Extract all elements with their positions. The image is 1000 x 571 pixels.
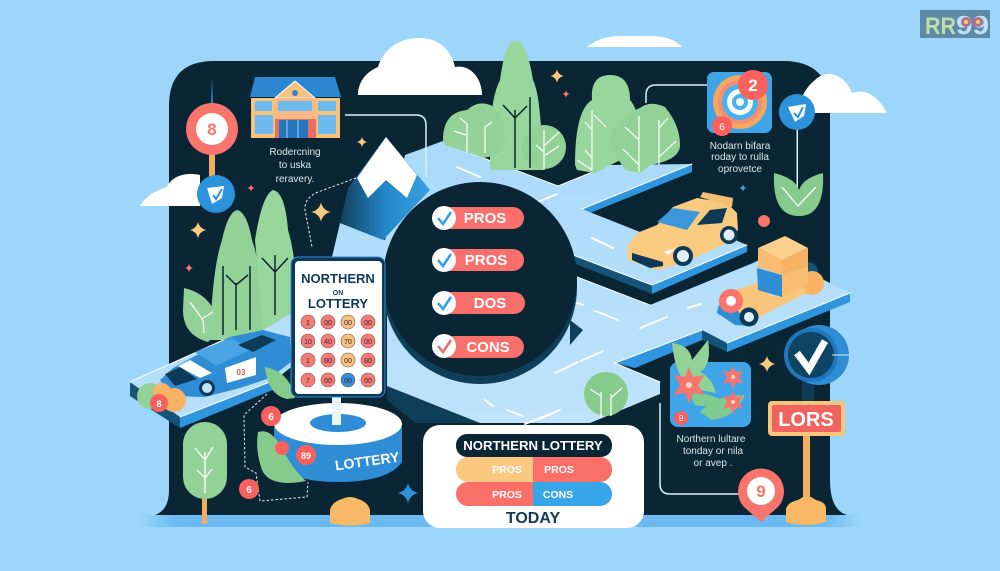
- road edge lines and lane dashes: [130, 153, 850, 424]
- pill: pros 2: [432, 248, 524, 272]
- marker: ball 8 with stem: 8: [207, 120, 217, 139]
- lottery sign board: 00: [324, 320, 332, 327]
- summary card: PROS: [544, 464, 574, 476]
- leaf by pedestal: [257, 431, 306, 483]
- pill: cons: CONS: [466, 339, 510, 356]
- target icon panel: 6: [719, 122, 725, 133]
- balls on car platform: 8: [156, 399, 162, 409]
- cloud: left: [140, 174, 200, 206]
- pill: dos: DOS: [474, 295, 506, 312]
- text: building caption: Rodercning: [269, 147, 321, 158]
- road walls: [130, 164, 850, 428]
- pin 9: 9: [756, 482, 766, 501]
- connector line: building to road: [345, 115, 426, 177]
- lottery sign board: 7: [306, 378, 310, 385]
- orange base: centre: [330, 497, 370, 526]
- lottery sign board: LOTTERY: [308, 296, 368, 311]
- yellow car: [627, 192, 738, 270]
- lottery sign board: 00: [344, 378, 352, 385]
- summary card: PROS: [492, 464, 522, 476]
- dashed path: pedestal: [244, 394, 308, 501]
- lottery sign board: 00: [344, 320, 352, 327]
- pill: dos: [432, 291, 525, 315]
- lottery sign board: 00: [344, 358, 352, 365]
- watermark logo: 99: [956, 10, 989, 40]
- lottery sign board: 70: [344, 339, 352, 346]
- lottery sign board: NORTHERN: [301, 271, 375, 286]
- lottery sign board: ON: [333, 290, 343, 297]
- cloud: right: [798, 74, 887, 113]
- central circle with depth: [383, 182, 583, 384]
- small tree on road: [584, 372, 628, 418]
- summary card: CONS: [543, 489, 573, 501]
- text: target caption: roday to rulla: [711, 152, 769, 163]
- watermark logo: [920, 10, 990, 40]
- flower panel: [670, 340, 751, 427]
- text: flower caption: [677, 434, 746, 469]
- cloud: top centre left: [358, 38, 482, 95]
- text: building caption: to uska: [279, 160, 312, 171]
- sparkles: [185, 70, 775, 503]
- pedestal: LOTTERY: [334, 448, 401, 473]
- leaf: left: [183, 288, 220, 342]
- trees: upper right group: [575, 75, 680, 173]
- number balls by pedestal: 89: [301, 451, 311, 461]
- summary card: [423, 425, 644, 528]
- pill: pros 1: [432, 206, 524, 230]
- cloud: top centre right: [587, 36, 682, 47]
- mountain: [340, 137, 430, 240]
- icon: check badge left: [197, 175, 235, 213]
- connector line: target icon to trees: [646, 85, 707, 103]
- blue race car: 03: [237, 368, 246, 377]
- lottery sign board: 00: [364, 378, 372, 385]
- summary card: PROS: [492, 489, 522, 501]
- text: target caption: Nodarn bifara: [710, 141, 771, 152]
- post and base: [786, 436, 826, 525]
- lottery sign board: 00: [324, 378, 332, 385]
- pill: cons: [432, 334, 524, 358]
- text: target caption: oprovetce: [718, 164, 762, 175]
- number balls by pedestal: [239, 406, 316, 499]
- lottery sign board: 00: [364, 320, 372, 327]
- lottery sign board: 00: [364, 339, 372, 346]
- leaf: right: [774, 173, 823, 216]
- text: target caption: [710, 141, 771, 175]
- balls on car platform: [137, 383, 186, 412]
- building: [250, 77, 341, 138]
- lottery sign board: 80: [324, 358, 332, 365]
- text: building caption: reravery.: [276, 174, 314, 185]
- dark main panel: [155, 61, 847, 515]
- lottery sign board: 1: [306, 358, 310, 365]
- road surface: [332, 141, 850, 423]
- marker: ball 8 with stem: [186, 77, 238, 179]
- LORS sign: [768, 401, 845, 436]
- blue race car: [160, 330, 291, 397]
- text: flower caption: or avep .: [694, 458, 732, 469]
- check sign right: [784, 325, 849, 405]
- target icon panel: 2: [748, 76, 758, 95]
- text: building caption: [269, 147, 321, 185]
- lottery sign board: [291, 257, 385, 397]
- orange cart with box: [717, 236, 824, 326]
- pin 9: [738, 469, 784, 522]
- LORS sign: LORS: [778, 409, 834, 431]
- lottery sign board: 1: [306, 320, 310, 327]
- number balls by pedestal: 6: [246, 485, 252, 496]
- pedestal: [274, 396, 402, 482]
- icon: check badge right with stem: [779, 94, 815, 188]
- trees: left group: [210, 190, 297, 340]
- bottom ground band: [140, 515, 860, 527]
- pill: pros 2: PROS: [465, 252, 507, 269]
- number balls by pedestal: 6: [268, 412, 274, 423]
- trees: upper centre group: [443, 40, 566, 170]
- flower panel: 9: [679, 414, 684, 423]
- text: flower caption: Northern lultare: [677, 434, 746, 445]
- summary card: NORTHERN LOTTERY: [463, 438, 603, 453]
- lottery sign board: 80: [364, 358, 372, 365]
- leaf by sign: [265, 367, 295, 399]
- text: flower caption: tonday or nila: [683, 446, 743, 457]
- left car platform: [130, 310, 300, 417]
- target icon panel: [707, 70, 772, 136]
- pill: pros 1: PROS: [464, 210, 506, 227]
- tree: bottom left: [183, 422, 227, 524]
- dashed path: mountain: [305, 178, 356, 247]
- watermark logo: RR: [925, 13, 956, 40]
- connector line: flower panel to pin: [660, 403, 742, 494]
- summary card: TODAY: [506, 510, 560, 527]
- lottery sign board: 40: [324, 339, 332, 346]
- lottery sign board: 10: [304, 339, 312, 346]
